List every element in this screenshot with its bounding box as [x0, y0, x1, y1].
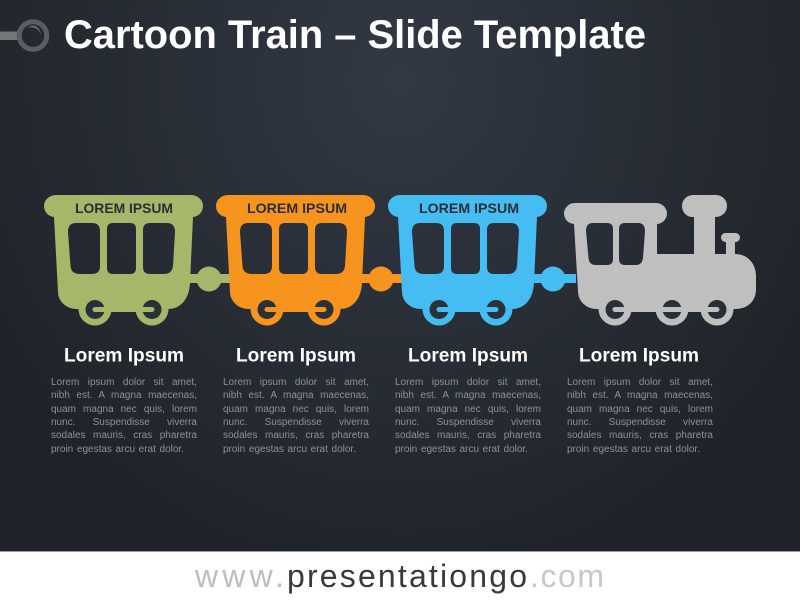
panel: orange wagon: LOREM IPSUM: [247, 200, 347, 216]
panel: green wagon: nunc. Suspendisse viverra: [51, 417, 197, 428]
panel: orange wagon: nibh est. A magna maecenas,: [223, 390, 369, 401]
panel: green wagon: quam magna nec quis, lorem: [51, 404, 197, 415]
panel: blue wagon: Lorem ipsum dolor sit amet,: [395, 377, 541, 388]
panel: grey locomotive: quam magna nec quis, lorem: [567, 404, 713, 415]
footer website address: .com: [530, 558, 604, 594]
panel: grey locomotive: nunc. Suspendisse viverra: [567, 417, 713, 428]
panel: grey locomotive: Lorem Ipsum: [579, 346, 699, 366]
panel: orange wagon: quam magna nec quis, lorem: [223, 404, 369, 415]
panel: green wagon: nibh est. A magna maecenas,: [51, 390, 197, 401]
panel: green wagon: sodales mauris, cras pharetra: [51, 430, 197, 441]
panel: grey locomotive: sodales mauris, cras pharetra: [567, 430, 713, 441]
footer website address: [0, 551, 800, 600]
title: Cartoon Train – Slide Template: [64, 13, 646, 57]
panel: orange wagon: [216, 195, 402, 455]
panel: blue wagon: nibh est. A magna maecenas,: [395, 390, 541, 401]
panel: blue wagon: sodales mauris, cras pharetra: [395, 430, 541, 441]
footer website address: presentationgo: [287, 558, 527, 594]
panel: orange wagon: Lorem ipsum dolor sit amet,: [223, 377, 369, 388]
panel: grey locomotive: Lorem ipsum dolor sit amet,: [567, 377, 713, 388]
panel: blue wagon: quam magna nec quis, lorem: [395, 404, 541, 415]
panel: green wagon: Lorem Ipsum: [64, 346, 184, 366]
panel: blue wagon: nunc. Suspendisse viverra: [395, 417, 541, 428]
panel: orange wagon: Lorem Ipsum: [236, 346, 356, 366]
footer website address: www.: [194, 558, 284, 594]
panel: blue wagon: [388, 195, 576, 455]
panel: orange wagon: sodales mauris, cras pharetra: [223, 430, 369, 441]
panel: green wagon: LOREM IPSUM: [75, 200, 173, 216]
panel: green wagon: [44, 195, 230, 455]
panel: green wagon: Lorem ipsum dolor sit amet,: [51, 377, 197, 388]
panel: blue wagon: proin egestas arcu erat dolor.: [395, 444, 528, 455]
panel: blue wagon: LOREM IPSUM: [419, 200, 519, 216]
panel: green wagon: proin egestas arcu erat dolor.: [51, 444, 184, 455]
icon: header wheel: [0, 19, 50, 52]
panel: grey locomotive: [564, 195, 756, 455]
panel: blue wagon: Lorem Ipsum: [408, 346, 528, 366]
panel: orange wagon: nunc. Suspendisse viverra: [223, 417, 369, 428]
panel: grey locomotive: nibh est. A magna maecenas,: [567, 390, 713, 401]
panel: orange wagon: proin egestas arcu erat dolor.: [223, 444, 356, 455]
panel: grey locomotive: proin egestas arcu erat dolor.: [567, 444, 700, 455]
